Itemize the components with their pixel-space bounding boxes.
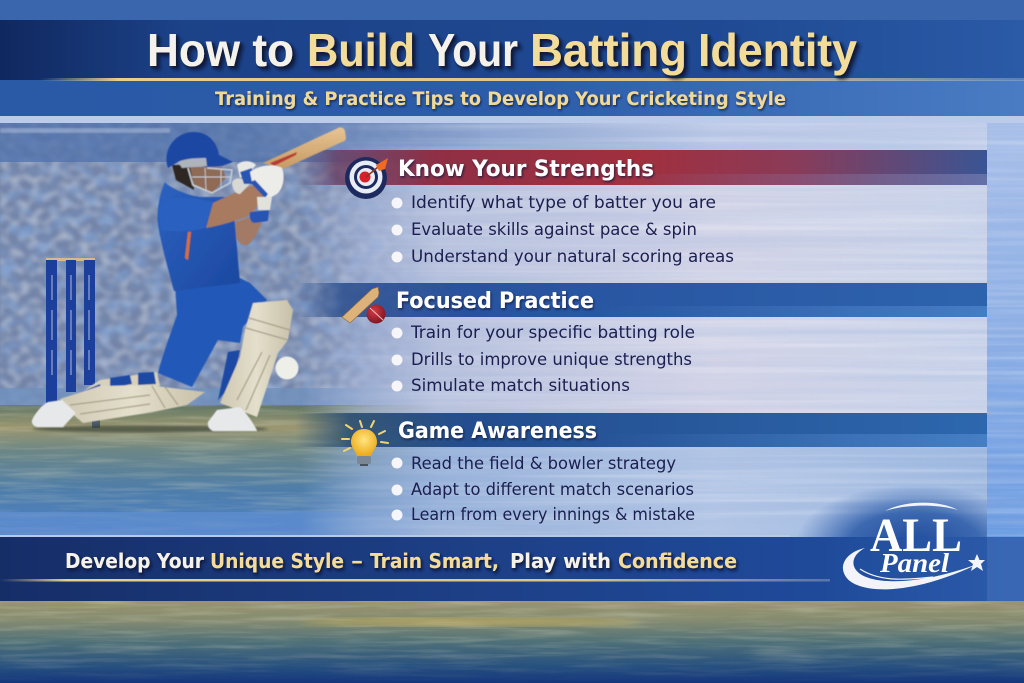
helmet (167, 132, 233, 193)
tagline (65, 549, 737, 573)
list: know your strengths: Understand your natural scoring areas (411, 247, 734, 267)
icon: light bulb (342, 421, 388, 466)
logo: ALL Panel (843, 503, 985, 589)
gloves (232, 161, 284, 223)
panel: focused practice body (300, 317, 987, 414)
tagline: Play with (510, 549, 611, 573)
back leg pad (60, 372, 205, 423)
list: game awareness (392, 454, 695, 525)
panel: know your strengths body (300, 184, 987, 283)
title: Batting (530, 24, 687, 76)
list: know your strengths: Identify what type of batter you are (411, 193, 716, 213)
band: focused practice (295, 283, 987, 317)
tagline: Confidence (618, 549, 737, 573)
wickets (46, 258, 100, 428)
player shadow (32, 426, 268, 432)
title: Your (428, 24, 518, 76)
heading: know your strengths: Know Your Strengths (398, 157, 654, 182)
title (147, 24, 857, 76)
player (32, 127, 346, 432)
heading: focused practice: Focused Practice (396, 289, 594, 314)
near arm (206, 184, 264, 228)
band: know your strengths (295, 150, 987, 185)
list: know your strengths: Evaluate skills against pace & spin (411, 220, 697, 240)
list: focused practice (392, 323, 695, 396)
icon: target (345, 157, 388, 199)
list: game awareness: Adapt to different match scenarios (411, 480, 694, 500)
subtitle: Training & Practice Tips to Develop Your Cricketing Style (215, 88, 786, 110)
title: How to (147, 24, 294, 76)
shoes (32, 400, 257, 431)
title: Identity (698, 24, 857, 76)
list: focused practice: Simulate match situations (411, 376, 630, 396)
list: game awareness: Learn from every innings & mistake (411, 505, 695, 525)
logo: ALL Panel: ALL (870, 509, 962, 562)
list: know your strengths (392, 193, 734, 267)
bat (263, 127, 346, 169)
stadium crowd (0, 122, 480, 406)
front leg pad (218, 300, 293, 417)
sleeve (160, 198, 213, 231)
tagline: Develop Your (65, 549, 204, 573)
far arm (235, 215, 262, 245)
ball (276, 356, 298, 380)
list: focused practice: Drills to improve unique strengths (411, 350, 692, 370)
footer band (0, 535, 1024, 601)
logo: ALL Panel: Panel (879, 548, 950, 578)
tagline: Unique Style (210, 549, 344, 573)
streak texture (300, 123, 1024, 536)
ground field (0, 405, 480, 537)
list: focused practice: Train for your specific batting role (410, 323, 695, 343)
icon: bat and ball (342, 287, 386, 324)
tagline: Train Smart, (370, 549, 499, 573)
list: game awareness: Read the field & bowler strategy (411, 454, 676, 474)
right edge strip (987, 123, 1024, 537)
lower field (0, 601, 1024, 683)
header band (0, 20, 1024, 81)
band: game awareness (295, 413, 987, 447)
tagline: – (351, 549, 363, 573)
heading: game awareness: Game Awareness (398, 419, 597, 444)
upper light stripe (0, 116, 1024, 150)
shorts (158, 278, 267, 387)
logo backing (780, 480, 987, 538)
panel: game awareness body (300, 446, 987, 537)
title: Build (307, 24, 415, 76)
shirt (157, 182, 240, 291)
